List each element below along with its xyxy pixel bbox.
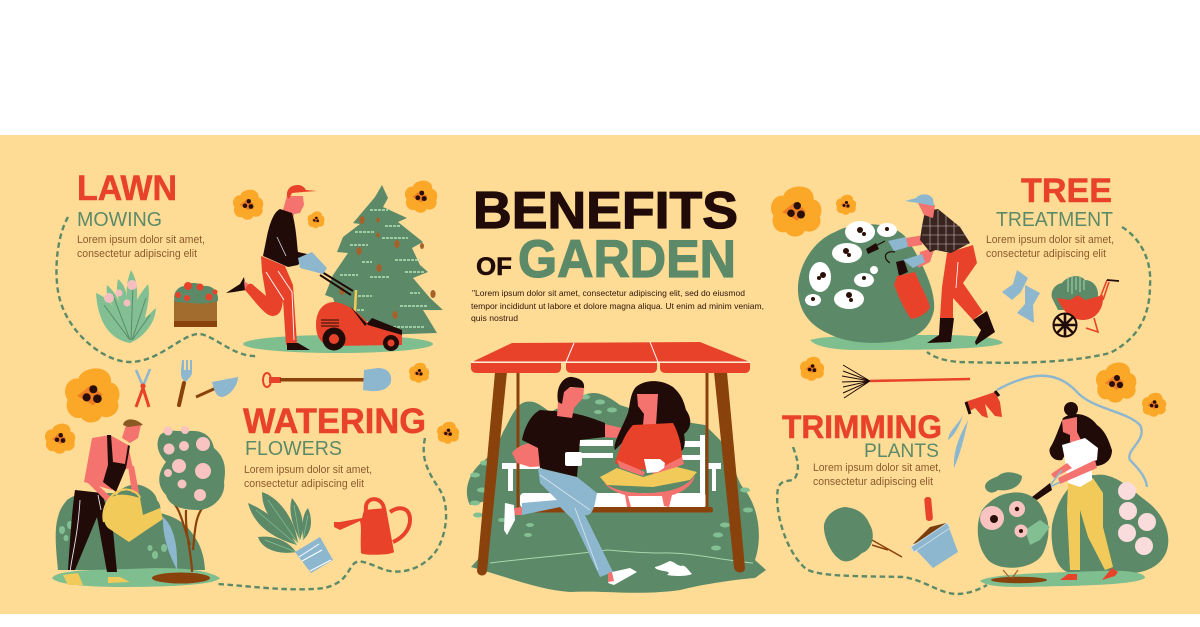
illustration: swing scene bbox=[467, 342, 766, 593]
icon: flower pot with trowel bbox=[911, 497, 958, 568]
decorative flowers bbox=[45, 181, 1166, 454]
woman on swing bbox=[600, 381, 697, 507]
sapling canopy bbox=[158, 431, 225, 510]
text block: tree treatment: TREATMENT bbox=[996, 209, 1113, 231]
title: GARDEN bbox=[518, 230, 736, 289]
watering can bbox=[104, 495, 163, 542]
illustration: spruce tree bbox=[325, 185, 443, 336]
icon: flowering plant bbox=[96, 270, 156, 343]
text block: watering flowers bbox=[243, 402, 426, 490]
white blooms bbox=[805, 221, 897, 309]
gardener bbox=[63, 419, 143, 585]
icon: trowel bbox=[196, 377, 238, 397]
bush bbox=[798, 224, 934, 343]
text block: trimming plants: PLANTS bbox=[864, 441, 939, 462]
text block: lawn mowing: LAWN bbox=[77, 169, 177, 208]
text block: tree treatment: consectetur adipiscing elit bbox=[986, 248, 1106, 260]
text block: tree treatment bbox=[986, 172, 1114, 260]
text block: trimming plants bbox=[782, 409, 942, 488]
icon: potted plant bbox=[248, 492, 333, 573]
illustration: tree treatment scene bbox=[798, 194, 1003, 350]
water stream bbox=[163, 517, 177, 570]
icon: flower box bbox=[174, 282, 218, 327]
pink blossoms bbox=[980, 501, 1028, 538]
soil bbox=[152, 572, 210, 584]
text block: lawn mowing: MOWING bbox=[77, 209, 162, 231]
illustration: watering scene bbox=[52, 419, 225, 587]
man on swing bbox=[504, 377, 637, 585]
woman trimming bbox=[1032, 402, 1118, 580]
icon: small shrub bbox=[824, 507, 902, 561]
dashed path: tree bbox=[927, 227, 1150, 363]
title: OF bbox=[476, 253, 512, 281]
text block: trimming plants: Lorem ipsum dolor sit amet, bbox=[813, 462, 941, 474]
intro paragraph: "Lorem ipsum dolor sit amet, consectetur adipiscing elit, sed do eiusmod bbox=[472, 288, 745, 298]
icon: garden shears bbox=[136, 369, 150, 407]
text block: tree treatment: Lorem ipsum dolor sit amet, bbox=[986, 234, 1114, 246]
water spray bbox=[948, 415, 968, 468]
soil bbox=[991, 577, 1047, 583]
blossom centres bbox=[990, 507, 1023, 533]
text block: watering flowers: Lorem ipsum dolor sit amet, bbox=[244, 464, 372, 476]
illustration: trimming scene bbox=[978, 402, 1168, 587]
leaf clusters bbox=[470, 394, 753, 550]
background band bbox=[0, 135, 1200, 614]
dashed path: watering bbox=[217, 438, 446, 589]
intro paragraph: tempor incididunt ut labore et dolore magna aliqua. Ut enim ad minim veniam, bbox=[471, 301, 764, 311]
text block: watering flowers: FLOWERS bbox=[245, 437, 342, 460]
canopy bbox=[472, 342, 750, 362]
text block: tree treatment: TREE bbox=[1021, 172, 1112, 210]
icon: red watering can bbox=[334, 499, 410, 555]
dashed path: trimming bbox=[777, 447, 987, 594]
bush bbox=[56, 485, 205, 570]
back bush bbox=[1052, 475, 1168, 573]
bush leaf spots bbox=[59, 521, 167, 559]
sprayer bbox=[866, 241, 930, 319]
ground line bbox=[490, 550, 753, 563]
icon: hose bbox=[997, 376, 1147, 487]
text block: watering flowers: consectetur adipiscing elit bbox=[244, 478, 364, 490]
dashed path: lawn bbox=[56, 217, 258, 362]
icon: rubber boots bbox=[1002, 270, 1040, 323]
text block: lawn mowing: Lorem ipsum dolor sit amet, bbox=[77, 234, 205, 246]
title bbox=[473, 182, 738, 289]
text block: trimming plants: TRIMMING bbox=[782, 409, 942, 445]
gardener bbox=[888, 194, 995, 345]
shoes on ground bbox=[655, 561, 692, 576]
illustration: lawn mower bbox=[316, 272, 402, 351]
ground bbox=[810, 335, 1003, 350]
text block: lawn mowing bbox=[77, 169, 205, 260]
sapling blossoms bbox=[164, 426, 211, 501]
posts bbox=[477, 372, 507, 576]
garden backdrop bbox=[467, 393, 766, 593]
front bush bbox=[978, 492, 1048, 568]
icon: wheelbarrow bbox=[1052, 276, 1119, 336]
light leaves on bush bbox=[1025, 520, 1050, 545]
illustration: man mowing bbox=[226, 185, 327, 350]
title: BENEFITS bbox=[473, 182, 738, 240]
text block: watering flowers: WATERING bbox=[243, 402, 426, 441]
sapling trunk bbox=[175, 505, 205, 572]
bloom spots bbox=[811, 227, 889, 302]
chains bbox=[518, 372, 707, 508]
icon: rake bbox=[842, 365, 970, 398]
bush stems bbox=[1003, 570, 1018, 578]
text block: trimming plants: consectetur adipiscing elit bbox=[813, 476, 933, 488]
intro paragraph bbox=[471, 288, 764, 323]
ground: lawn bbox=[243, 335, 433, 353]
icon: shovel bbox=[263, 368, 391, 391]
ground bbox=[980, 571, 1145, 587]
icon: hand fork bbox=[179, 360, 192, 405]
bench bbox=[502, 435, 721, 508]
loose clippings bbox=[985, 472, 1022, 493]
can handle bbox=[103, 489, 140, 522]
hydrangeas bbox=[1118, 482, 1156, 555]
icon: hose nozzle bbox=[965, 391, 1002, 418]
text block: lawn mowing: consectetur adipiscing elit bbox=[77, 248, 197, 260]
ground bbox=[52, 568, 220, 587]
intro paragraph: quis nostrud bbox=[471, 313, 518, 323]
